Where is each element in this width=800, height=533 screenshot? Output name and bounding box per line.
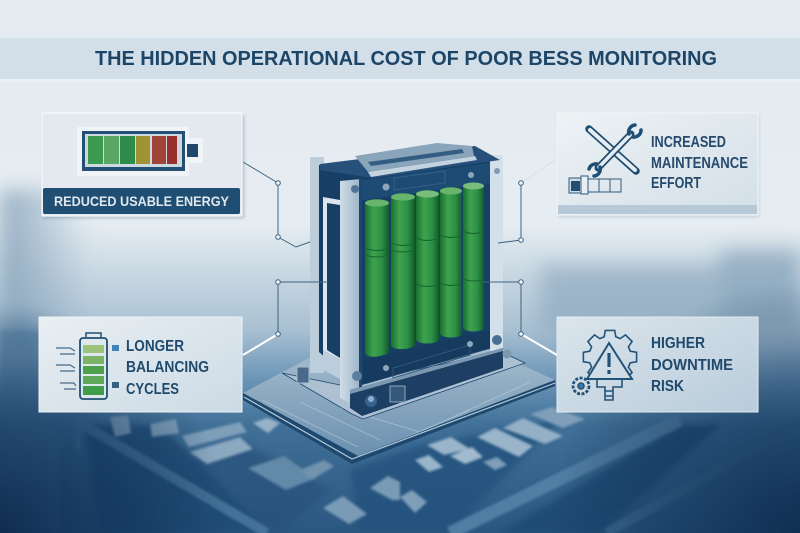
frame body dark (319, 160, 503, 385)
battery module (282, 143, 525, 419)
back left post (310, 157, 324, 373)
icon: crossed tools (589, 125, 641, 176)
cell 2 (391, 193, 415, 349)
label bar (43, 188, 240, 214)
label: CYCLES (126, 381, 179, 398)
label: INCREASED (651, 134, 726, 151)
base rail (350, 348, 503, 416)
title: THE HIDDEN OPERATIONAL COST OF POOR BESS MONITORING (95, 47, 717, 70)
label (126, 338, 209, 398)
cell 3 (416, 190, 439, 344)
label (651, 335, 733, 395)
left side panel (323, 197, 340, 360)
cell 1 (365, 199, 389, 357)
top busbars (320, 146, 500, 178)
base plate (282, 352, 525, 419)
panel: longer balancing cycles (39, 317, 242, 412)
label: HIGHER (651, 335, 705, 352)
label: EFFORT (651, 175, 701, 192)
panel: higher downtime risk (557, 317, 758, 412)
connector lines (243, 160, 557, 355)
panel: reduced usable energy (42, 113, 244, 218)
label: RISK (651, 378, 684, 395)
lower cross plate (363, 330, 490, 384)
panel: increased maintenance effort (557, 113, 759, 217)
icon: battery with falling charge (77, 127, 203, 176)
cell 5 (463, 182, 484, 332)
cells (365, 182, 484, 357)
icon: gears and warning triangle (573, 330, 637, 400)
icon: small battery meter (569, 176, 621, 194)
back right post (490, 155, 503, 351)
label (651, 134, 748, 192)
cell 4 (440, 187, 462, 338)
front post (340, 179, 361, 409)
icon: charging battery (56, 333, 119, 399)
label: DOWNTIME (651, 357, 733, 374)
platform under battery (243, 310, 555, 464)
title band (0, 38, 800, 80)
upper cross plate (362, 163, 490, 200)
label: BALANCING (126, 359, 209, 376)
label: LONGER (126, 338, 184, 355)
label: REDUCED USABLE ENERGY (54, 193, 230, 209)
label: MAINTENANCE (651, 155, 748, 172)
